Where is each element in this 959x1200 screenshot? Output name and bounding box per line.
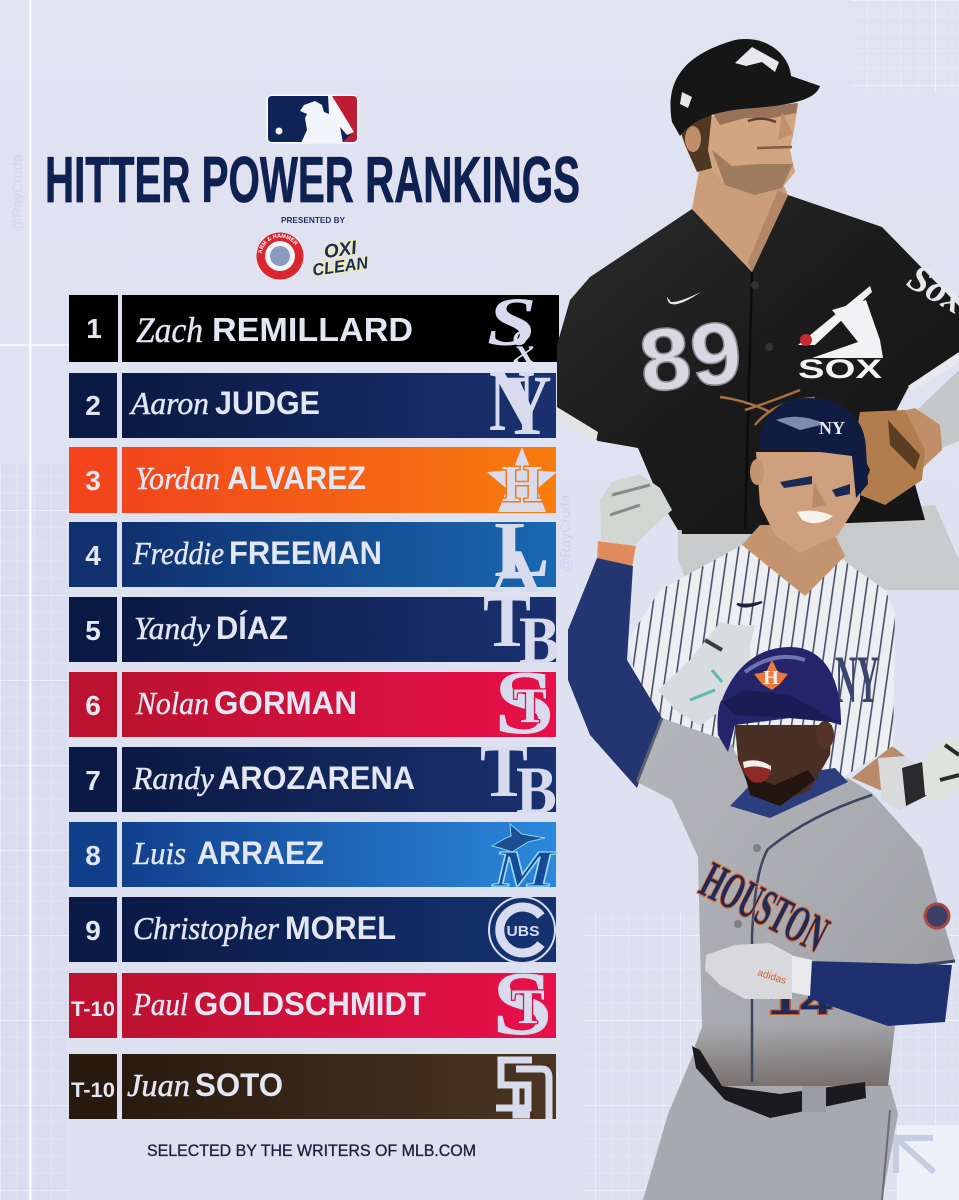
logo: White Sox: x [513, 333, 534, 370]
smile [797, 511, 833, 523]
belt [692, 1046, 866, 1118]
row 11: SOTO [195, 1067, 283, 1103]
row 4 [69, 505, 556, 606]
presented by: PRESENTED BY [281, 215, 345, 225]
row 10 [69, 954, 556, 1054]
logo: Cardinals: S [494, 653, 555, 753]
row 3 [69, 447, 557, 513]
sleeve edge [637, 718, 662, 782]
logo: White Sox: o [513, 319, 528, 352]
row 9 [69, 897, 556, 963]
helmet [717, 647, 841, 752]
row 1: 1 [86, 313, 102, 344]
row 9: 9 [85, 915, 101, 946]
row 2: 2 [85, 390, 101, 421]
row 7: AROZARENA [218, 760, 415, 796]
logo: Dodgers: L [494, 505, 550, 594]
logo: White Sox: S [487, 284, 537, 361]
row 9: Christopher [133, 910, 280, 946]
wristband [597, 541, 636, 567]
row 11: T-10 [71, 1079, 115, 1102]
mouth [742, 760, 772, 783]
neck [742, 525, 845, 596]
logo: Dodgers: A [490, 538, 542, 606]
sponsor: OxiClean: CLEAN [311, 253, 370, 280]
row 9: MOREL [285, 910, 396, 946]
beard [745, 770, 815, 806]
row 11 [69, 1054, 556, 1119]
row 8: ARRAEZ [197, 835, 324, 871]
row 2: JUDGE [215, 385, 320, 421]
row 4: FREEMAN [229, 535, 382, 571]
row 8: Luis [132, 835, 186, 871]
watermark: @RayCruda [9, 155, 25, 232]
pants [678, 505, 959, 590]
pants [643, 1050, 898, 1200]
hair and ear [680, 112, 712, 172]
logo: Cardinals: S [492, 954, 553, 1054]
lower arm sleeve [808, 961, 952, 1026]
jersey script: HOUSTON [692, 852, 837, 964]
helmet [760, 398, 868, 498]
player: Aaron Judge: NY [819, 418, 845, 438]
nose [812, 482, 826, 508]
logo: Astros [487, 447, 557, 513]
row 1: Zach [136, 310, 203, 350]
player: Yordan Alvarez [568, 474, 955, 1200]
row 10: GOLDSCHMIDT [194, 986, 426, 1022]
player: Zach Remillard [557, 39, 959, 590]
row 7: 7 [85, 765, 101, 796]
glove [855, 410, 925, 505]
row 8: 8 [85, 840, 101, 871]
logo: Rays [483, 578, 560, 678]
pinstripe jersey [628, 545, 895, 790]
jersey number: 89 [635, 302, 746, 411]
forearm [880, 408, 942, 475]
collar [730, 768, 848, 818]
logo: Cubs [489, 897, 555, 963]
chest logo: SOX [798, 354, 882, 384]
head [695, 104, 798, 195]
row 3: Yordan [135, 460, 220, 496]
mouth [757, 147, 792, 148]
row 3: ALVAREZ [227, 460, 366, 496]
logo: Rays [480, 728, 557, 828]
player: Aaron Judge: NY [835, 641, 879, 717]
row 11: Juan [127, 1067, 190, 1103]
logo: Padres [496, 1060, 549, 1119]
row 7: Randy [132, 760, 215, 796]
logo: Cubs: UBS [506, 923, 540, 940]
MLB logo [266, 94, 358, 144]
jersey [557, 195, 959, 530]
row 6: GORMAN [214, 685, 357, 721]
swoosh [737, 602, 762, 607]
row 2: Aaron [129, 385, 209, 421]
row 1: REMILLARD [212, 311, 413, 348]
wristband [790, 955, 812, 996]
sleeve trim [908, 352, 959, 392]
logo: Cardinals: T [511, 978, 545, 1034]
sponsor: Arm and Hammer: ARM & HAMMER [258, 234, 298, 254]
jersey [637, 718, 955, 1086]
raised arm sleeve [568, 558, 662, 788]
jersey number: 14 [768, 984, 832, 1022]
row 4: 4 [85, 540, 101, 571]
title: HITTER POWER RANKINGS [45, 143, 580, 216]
nose [778, 112, 793, 140]
helmet logo: H [763, 667, 779, 689]
sponsor: Arm and Hammer [256, 232, 304, 280]
row 6 [69, 653, 556, 753]
logo: Marlins: M [492, 841, 557, 898]
swoosh [667, 292, 701, 304]
row 8 [69, 822, 557, 898]
belt [680, 514, 760, 534]
logo: Yankees: N [489, 352, 535, 450]
far arm [852, 746, 905, 790]
player: Aaron Judge [628, 398, 959, 810]
row 10: T-10 [71, 998, 115, 1021]
row 5: 5 [85, 615, 101, 646]
head [756, 452, 860, 553]
raised glove [658, 622, 755, 726]
sponsor: OxiClean: OXI [323, 238, 359, 263]
arrow icon [896, 1125, 959, 1200]
row 5: DÍAZ [216, 610, 288, 646]
rankings table [69, 284, 560, 1119]
logo: Rays: T [483, 578, 531, 662]
logo: Rays: B [516, 752, 557, 828]
beard [712, 150, 793, 195]
logo: Rays: T [480, 728, 528, 812]
eye black [780, 476, 812, 488]
row 5: Yandy [134, 610, 211, 646]
logo: Marlins [492, 824, 557, 898]
row 10: Paul [132, 986, 188, 1022]
piping [752, 795, 872, 1082]
neck [692, 165, 788, 272]
row 7 [69, 728, 557, 828]
waist shading [695, 1025, 895, 1086]
footer credit: SELECTED BY THE WRITERS OF MLB.COM [147, 1141, 476, 1160]
grey arm sleeve [918, 370, 959, 448]
row 2 [69, 352, 556, 453]
row 6: Nolan [135, 685, 209, 721]
row 5 [69, 578, 560, 678]
row 1 [69, 295, 559, 362]
sponsor: OxiClean [309, 236, 370, 280]
row 3: 3 [85, 465, 101, 496]
cap [671, 39, 820, 136]
shoulder patch [925, 904, 949, 928]
eye [748, 119, 776, 122]
player: Yordan Alvarez: adidas [756, 967, 787, 987]
brow shadow [712, 103, 798, 125]
helmet logo [754, 660, 788, 690]
head [735, 725, 832, 805]
watermark: @RayCruda [557, 495, 573, 572]
chest buttons [751, 281, 759, 289]
logo: Astros: H [502, 456, 542, 513]
chest logo [798, 286, 883, 384]
placket [745, 272, 752, 530]
logo: Yankees: Y [502, 358, 552, 453]
logo: Cardinals: T [513, 677, 547, 733]
raised arm glove [600, 474, 672, 546]
row 4: Freddie [132, 535, 224, 571]
batting glove [705, 943, 792, 999]
logo: Rays: B [519, 602, 560, 678]
row 6: 6 [85, 690, 101, 721]
